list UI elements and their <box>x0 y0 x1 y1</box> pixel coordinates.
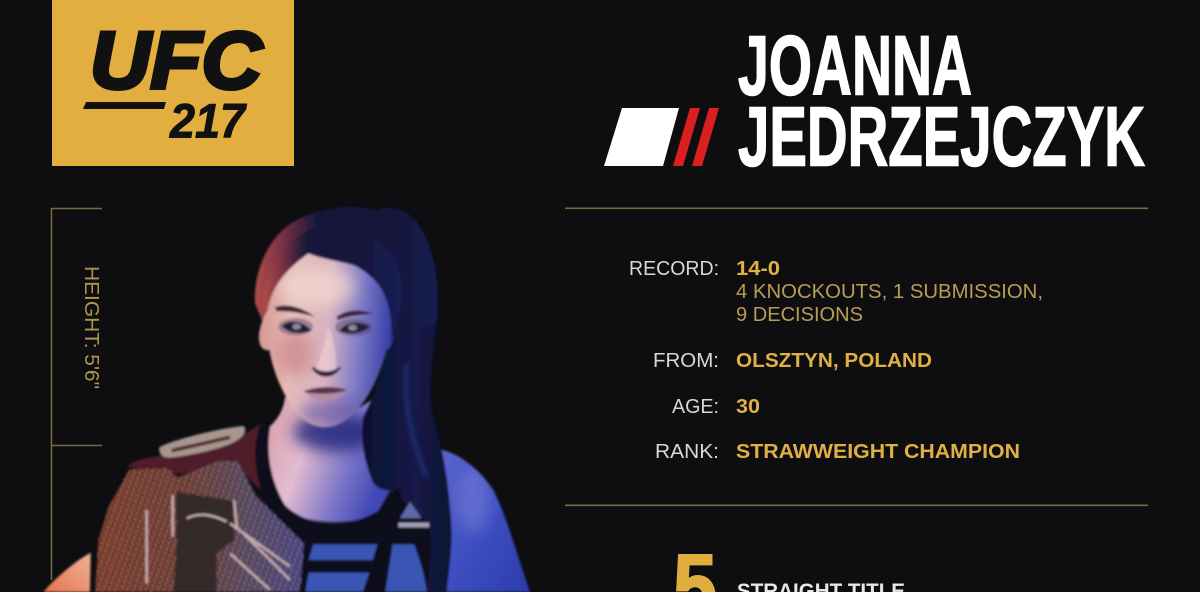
belt center letter highlights <box>147 495 290 590</box>
red slash 2 <box>692 108 719 166</box>
eyebrows <box>275 306 373 320</box>
nose highlight <box>316 327 336 370</box>
cheek blush <box>277 330 313 377</box>
white parallelogram <box>604 108 679 166</box>
divider bottom <box>565 504 1148 506</box>
from row: FROM: <box>653 349 719 372</box>
height label: HEIGHT: 5'6" <box>80 266 102 389</box>
record row: 4 KNOCKOUTS, 1 SUBMISSION, <box>736 280 1043 303</box>
tank top logo stripes <box>305 544 427 592</box>
eye sockets <box>278 318 372 336</box>
from row: OLSZTYN, POLAND <box>736 349 932 372</box>
belt body <box>95 461 304 592</box>
hair lock sheen <box>406 363 427 477</box>
eye highlights <box>292 324 357 331</box>
rank row: STRAWWEIGHT CHAMPION <box>736 440 1020 463</box>
fighter stats <box>629 257 1043 463</box>
front hair strands <box>263 225 402 343</box>
nose shadow <box>313 367 340 375</box>
belt center plate <box>173 492 234 592</box>
plate shadow detail <box>172 437 230 451</box>
first name: JOANNA <box>738 18 972 112</box>
age row <box>672 395 760 418</box>
shoulder plate <box>159 426 245 458</box>
record row <box>629 257 1043 326</box>
arm highlight <box>457 467 490 533</box>
from row <box>653 349 932 372</box>
record row: RECORD: <box>629 257 719 280</box>
divider top <box>565 208 1148 209</box>
record row: 9 DECISIONS <box>736 303 863 326</box>
hair back and ponytail <box>255 207 452 592</box>
tank top <box>253 423 447 592</box>
neck and chest skin <box>264 397 397 522</box>
tank top brand mark <box>398 502 429 527</box>
red slash 1 <box>673 108 700 166</box>
age row: AGE: <box>672 395 719 418</box>
record row: 14-0 <box>736 257 780 280</box>
UFC 217 logo <box>52 0 294 166</box>
logo event number: 217 <box>169 96 247 148</box>
logo bar <box>83 102 166 109</box>
name title <box>738 18 1145 184</box>
height bracket <box>52 208 102 580</box>
title slash mark <box>604 108 719 166</box>
strap <box>127 423 261 490</box>
bracket lines <box>52 208 102 580</box>
belt texture <box>95 461 304 592</box>
belt strap and shoulder plate <box>95 423 304 592</box>
right shoulder and arm <box>437 449 530 592</box>
fighter portrait <box>43 207 530 592</box>
forehead highlight <box>278 267 355 307</box>
chin shadow <box>300 398 380 428</box>
eyes <box>282 322 370 333</box>
stat: straight title <box>673 536 905 592</box>
face <box>259 253 394 427</box>
left arm <box>43 553 91 592</box>
logo wordmark: UFC <box>90 16 264 106</box>
rank row: RANK: <box>655 440 719 463</box>
face shading <box>272 264 362 428</box>
logo gold panel <box>52 0 294 166</box>
neck shadow <box>293 412 377 452</box>
lips <box>303 387 347 401</box>
hair lock over shoulder <box>362 323 452 592</box>
age row: 30 <box>736 395 760 418</box>
